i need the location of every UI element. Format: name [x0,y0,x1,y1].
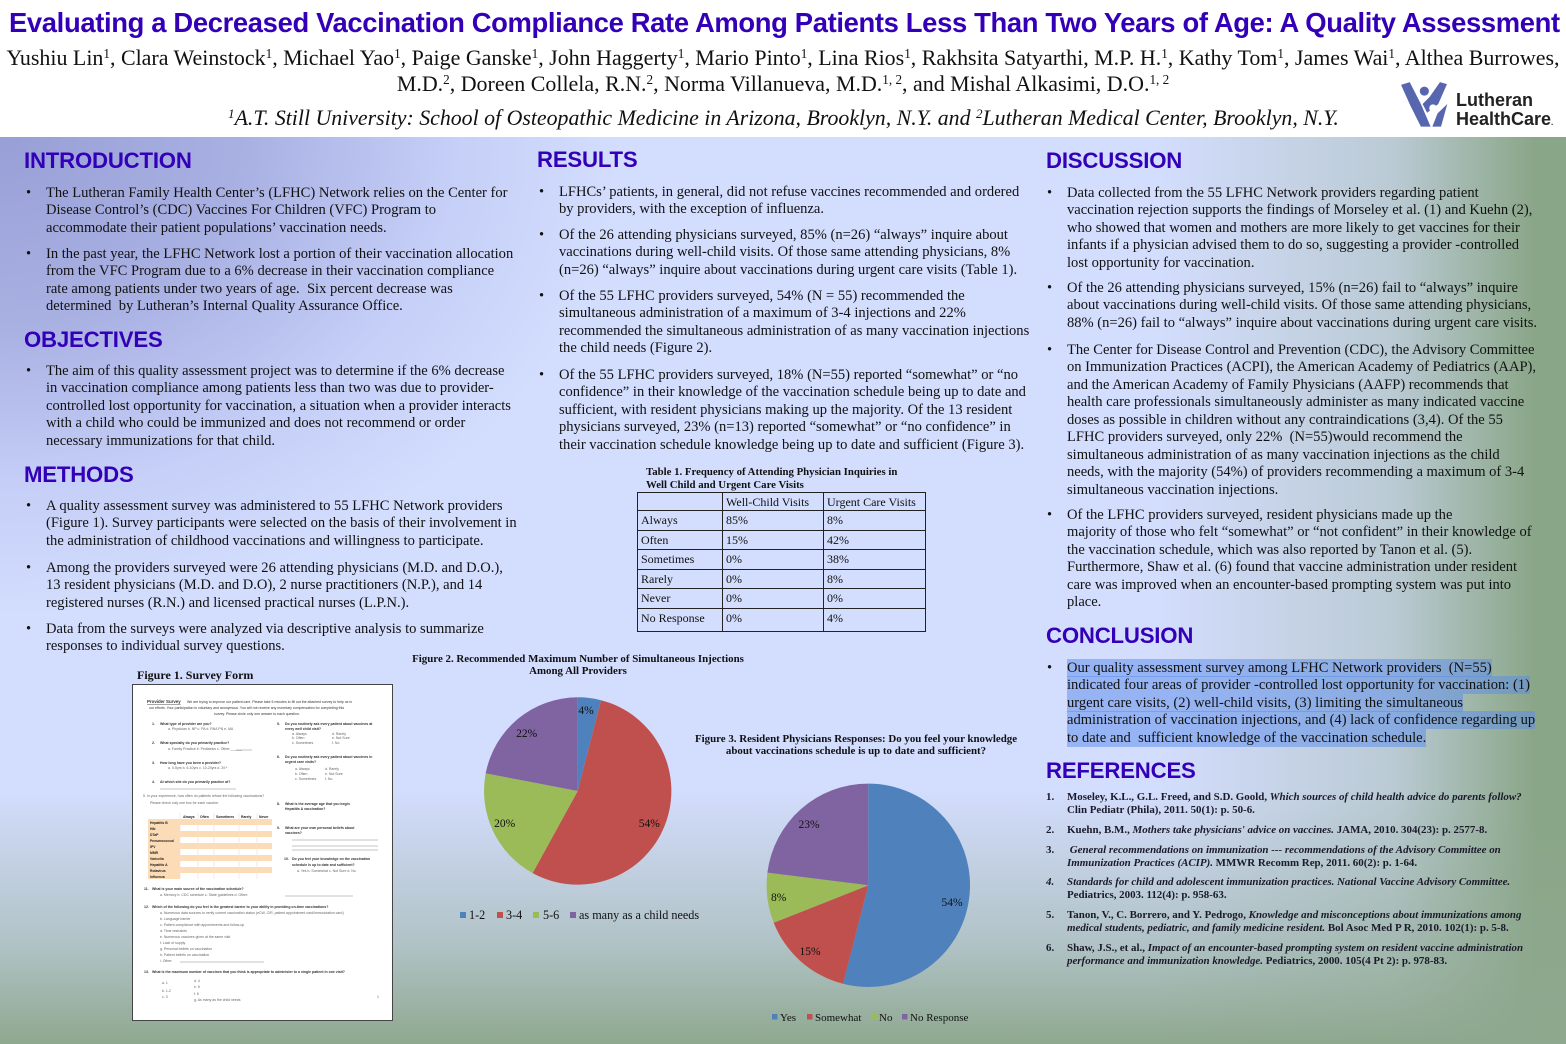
survey vaccine table: Varicella [150,857,164,861]
survey vaccine table: DTaP [150,833,159,837]
text: conclusion highlighted [1067,660,1535,747]
survey vaccine table: Never [259,815,269,819]
reference 6: performance and immunization knowledge. Pediatrics, 2000. 105(4 Pt 2): p. 978-83. [1067,955,1447,967]
survey vaccine table: Rotavirus [150,869,166,873]
figure 1: survey form: every well child visit? [285,727,321,731]
table 1: Always [641,513,678,527]
figure 1: survey form: Do you routinely ask every patient about vaccines at [285,722,373,726]
figure 1: survey form: What type of provider are you? [160,722,212,726]
logo: Lutheran HealthCare [1401,82,1553,129]
figure 1: survey form: What is the maximum number of vaccines that you think is appropriate to administer to a single patient in one visit? [152,970,345,974]
caption: table 1 [646,466,898,491]
text: 6. [1046,942,1054,954]
table 1: Often [641,533,668,547]
figure 1: survey form: d. Time restraints [160,929,187,933]
table 1: 15% [726,533,748,547]
figure 1: survey form: e. Numerous vaccines given at the same visit [160,935,230,939]
text: objectives: controlled lost opportunity for vaccination, a situation when a provider interacts [46,398,511,414]
text: discussion paragraph 2 [1067,280,1537,332]
figure 1: survey form: 1 [377,995,379,999]
figure 1: survey form: g. As many as the child needs [194,998,241,1002]
figure 1: survey form: 2. [152,741,155,745]
figure 1: survey form: 10. [284,857,289,861]
survey vaccine table: Sometimes [216,815,234,819]
reference 6 [1046,942,1523,967]
figure 1: survey form: i. Other: [160,959,172,963]
caption: figure 2 [412,653,744,677]
text: introduction paragraph 2: In the past year, the LFHC Network lost a portion of their vaccination allocation [46,246,513,262]
text: 3. [1046,844,1054,856]
table 1: 38% [827,552,849,566]
figure 1: survey form: our efforts. Your participation is voluntary and anonymous. You will not receive any monetary compensation for completing this [149,706,344,710]
text: objectives: with a child who could be immunized and does not recommend or order [46,415,465,431]
text: results paragraph 4: physicians surveyed, 23% (n=13) reported “somewhat” or “no confidence” in [559,419,1011,435]
table 1: Well-Child Visits [726,495,809,509]
text: results paragraph 2: Of the 26 attending physicians surveyed, 85% (n=26) “always” inquire about [559,227,1008,243]
text: discussion paragraph 3: on Immunization Practices (ACPI), the American Academy of Pediatrics (AAP), [1067,359,1536,375]
figure 1: survey form: a. 0-5yrs b. 6-10yrs c. 10-20yrs d. 20+ [168,766,227,770]
heading: methods: METHODS [24,462,134,487]
text: introduction paragraph 1 [46,185,507,237]
reference 4: Pediatrics, 2003. 112(4): p. 958-63. [1067,889,1227,901]
figure 1: survey form: What is the average age that you begin [285,802,350,806]
text: results paragraph 3: the child needs (Figure 2). [559,340,712,356]
figure 1: survey form: 5. In your experience, how often do patients refuse the following vaccinations? [143,794,264,798]
text: results paragraph 3: simultaneous administration of a maximum of 3-4 injections and 22% [559,305,966,321]
table 1: 0% [827,591,843,605]
caption: figure 2: Figure 2. Recommended Maximum Number of Simultaneous Injections [412,653,744,665]
table 1: Sometimes [641,552,694,566]
text: results paragraph 2: vaccinations during well-child visits. Of those same attending physicians, 8% [559,244,1010,260]
figure 1: survey form: urgent care visits? [285,760,316,764]
figure 1: survey form: a. Always [292,732,307,736]
reference 1: Clin Pediatr (Phila), 2011. 50(1): p. 50-6. [1067,804,1255,816]
text: discussion paragraph 1: lost opportunity for vaccination. [1067,255,1254,271]
text: discussion paragraph 3: health care professionals simultaneously administer as many indicated vaccine [1067,394,1524,410]
figure 1: survey form: f. No [325,777,332,781]
figure 1: survey form: schedule is up to date and sufficient? [292,863,355,867]
reference 2: Kuehn, B.M., Mothers take physicians' advice on vaccines. JAMA, 2010. 304(23): p. 2577-8. [1067,824,1487,836]
text: discussion paragraph 3 [1067,342,1536,499]
figure 1: survey form: 3. [152,761,155,765]
text: methods paragraph 2: registered nurses (R.N.) and licensed practical nurses (L.P.N.). [46,595,409,611]
figure 1: survey form: How long have you been a provider? [160,761,221,765]
table 1: No Response [641,611,705,625]
reference 1 [1046,791,1522,816]
text: objectives: necessary immunizations for that child. [46,433,275,449]
figure 3: pie chart: 15% [799,946,821,958]
caption: figure 3 [695,733,1017,757]
figure 3: pie chart: 23% [798,819,820,831]
text: discussion paragraph 3: and the American Academy of Family Physicians (AAFP) recommends that [1067,377,1509,393]
table 1: 85% [726,513,748,527]
text: discussion paragraph 2: about vaccinations during well-child visits. Of those same attending physicians, [1067,297,1531,313]
authors [6,45,1559,96]
reference 3: General recommendations on immunization --- recommendations of the Advisory Committee on [1070,844,1501,856]
text: results paragraph 4: their vaccination schedule knowledge being up to date and sufficient (Figure 3). [559,437,1024,453]
figure 1: survey form: a. Physician b. NP c. PA d. RN/LPN e. MA [168,727,234,731]
figure 1: survey form: We are trying to improve our patient care. Please take 5 minutes to fill out the attached survey to help us in [187,700,352,704]
table 1: 0% [726,572,742,586]
heading: references: REFERENCES [1046,758,1196,783]
figure 1: survey form: c. Sometimes [295,777,316,781]
figure 1: survey form: Provider Survey [147,699,181,704]
text: 1. [1046,791,1054,803]
text: methods paragraph 2 [46,560,503,612]
figure 1: survey form: d. 4 [194,979,200,983]
figure 1: survey form: a. 1 [162,981,168,985]
caption: figure 3: about vaccinations schedule is up to date and sufficient? [726,745,986,757]
text: conclusion highlighted: Our quality assessment survey among LFHC Network providers (N=55) [1067,660,1492,676]
text: introduction paragraph 1: Disease Control’s (CDC) Vaccines For Children (VFC) Program to [46,202,436,218]
figure 1: survey form: f. Lack of supply [160,941,186,945]
text: results paragraph 2: (n=26) “always” inquire about vaccinations during urgent care visits (Table 1). [559,262,1017,278]
text: objectives: The aim of this quality assessment project was to determine if the 6% decrease [46,363,504,379]
text: results paragraph 4: Of the 55 LFHC providers surveyed, 18% (N=55) reported “somewhat” or “no [559,367,1018,383]
figure 1: survey form: 8. [277,802,280,806]
survey vaccine table: Rarely [241,815,251,819]
text: 5. [1046,909,1054,921]
figure 3 legend: No [879,1012,893,1024]
text: methods paragraph 1: (Figure 1). Survey participants were selected on the basis of their involvement in [46,515,517,531]
text: discussion paragraph 3: simultaneous vaccination injections. [1067,482,1278,498]
figure 1: survey form: b. Often [292,736,305,740]
figure 1: survey form: 6. [277,755,280,759]
figure 2: pie chart [460,697,699,922]
heading: introduction: INTRODUCTION [24,148,192,173]
figure 2 legend: 1-2 [469,908,485,922]
figure 3 legend: Yes [780,1012,796,1024]
figure 1: survey form [132,684,393,1021]
heading: results: RESULTS [537,147,638,172]
figure 1: survey form: b. Often [295,772,308,776]
figure 1: survey form: What is your main source of the vaccination schedule? [152,887,244,891]
figure 1: survey form: c. 3 [162,995,168,999]
text: discussion paragraph 4 [1067,507,1532,612]
text: 2. [1046,824,1054,836]
figure 1: survey form: e. 5 [194,985,200,989]
text: results paragraph 4: confidence” in their knowledge of the vaccination schedule being up to date and [559,384,1026,400]
text: introduction paragraph 2: determined by Lutheran’s Internal Quality Assurance Office. [46,298,403,314]
text: discussion paragraph 3: LFHC providers surveyed, only 22% (N=55)would recommend the [1067,429,1463,445]
survey vaccine table: MMR [150,851,159,855]
figure 1: survey form: 12. [144,905,149,909]
figure 3 legend: Somewhat [815,1012,861,1024]
figure 1: survey form: d. Rarely [332,732,346,736]
figure 1: survey form: 5. [277,722,280,726]
reference 3 [1046,844,1501,869]
figure 1: survey form: b. 1-2 [162,989,171,993]
heading: conclusion: CONCLUSION [1046,623,1193,648]
figure 1: survey form: Do you feel your knowledge on the vaccination [292,857,370,861]
text: discussion paragraph 2: 88% (n=26) fail to “always” inquire about vaccinations during urgent care visits. [1067,315,1537,331]
table 1: Rarely [641,572,673,586]
affiliations: 1A.T. Still University: School of Osteopathic Medicine in Arizona, Brooklyn, N.Y. and 2Lutheran Medical Center, Brooklyn, N.Y. [228,106,1339,130]
text: methods paragraph 1: the administration of childhood vaccinations and willingness to participate. [46,533,484,549]
text: methods paragraph 1: A quality assessment survey was administered to 55 LFHC Network providers [46,498,503,514]
text: introduction paragraph 1: The Lutheran Family Health Center’s (LFHC) Network relies on the Center for [46,185,507,201]
figure 2 legend: as many as a child needs [579,908,699,922]
figure 1: survey form: Hepatitis A vaccination? [285,807,325,811]
text: discussion paragraph 4: place. [1067,594,1101,610]
heading: objectives: OBJECTIVES [24,327,163,352]
text: discussion paragraph 1: Data collected from the 55 LFHC Network providers regarding patient [1067,185,1479,201]
text: results paragraph 3: Of the 55 LFHC providers surveyed, 54% (N = 55) recommended the [559,288,965,304]
logo: Lutheran HealthCare: Lutheran [1456,90,1533,110]
survey vaccine table: Hepatitis B [150,821,168,825]
figure 1: survey form: Which of the following do you feel is the greatest barrier to your ability in providing on-time vaccinations? [152,905,328,909]
text: methods paragraph 2: Among the providers surveyed were 26 attending physicians (M.D. and D.O.), [46,560,503,576]
table 1: 8% [827,572,843,586]
text: discussion paragraph 1: who showed that women and mothers are more likely to get vaccines for their [1067,220,1520,236]
reference 5: medical students, pediatric, and family medicine resident. Bol Asoc Med P R, 2010. 102(1): p. 5-8. [1067,922,1509,934]
figure 3 legend: No Response [910,1012,968,1024]
figure 1: survey form: a. Yes b. Somewhat c. Not Sure d. No [297,869,356,873]
figure 1: survey form: 9. [277,826,280,830]
figure 2 legend: 5-6 [543,908,559,922]
text: methods paragraph 1 [46,498,517,550]
text: results paragraph 4: sufficient, with resident physicians making up the majority. Of the 13 resident [559,402,1012,418]
survey vaccine table: IPV [150,845,156,849]
survey vaccine table: Always [183,815,195,819]
text: results paragraph 4 [559,367,1026,454]
figure 2 legend: 3-4 [506,908,522,922]
text: results paragraph 3: recommended the simultaneous administration of as many vaccination injections [559,323,1029,339]
figure 1: survey form: e. Not Sure [325,772,343,776]
caption: figure 3: Figure 3. Resident Physicians Responses: Do you feel your knowledge [695,733,1017,745]
caption: figure 1: Figure 1. Survey Form [137,668,253,682]
survey vaccine table: Pneumococcal [150,839,174,843]
text: objectives: in vaccination compliance among patients less than two was due to provider- [46,380,494,396]
text: introduction paragraph 2: from the VFC Program due to a 6% decrease in their vaccination compliance [46,263,494,279]
text: 4. [1046,876,1054,888]
title: Evaluating a Decreased Vaccination Compliance Rate Among Patients Less Than Two Years of Age: A Quality Assessment [9,7,1560,38]
figure 1: survey form: Please check only one box for each vaccine. [150,801,219,805]
table 1 [637,492,926,632]
authors: Yushiu Lin1, Clara Weinstock1, Michael Yao1, Paige Ganske1, John Haggerty1, Mario Pinto1, Lina Rios1, Rakhsita Satyarthi, M.P. H.1, Kathy Tom1, James Wai1, Althea Burrowes, [6,45,1559,70]
text: discussion paragraph 4: care was improved when an encounter-based prompting system was put into [1067,577,1511,593]
figure 1: survey form: What specialty do you primarily practice? [160,741,229,745]
figure 1: survey form: h. Patient beliefs on vaccination [160,953,209,957]
text: discussion paragraph 2: Of the 26 attending physicians surveyed, 15% (n=26) fail to “always” inquire [1067,280,1518,296]
text: results paragraph 1: LFHCs’ patients, in general, did not refuse vaccines recommended and ordered [559,184,1019,200]
figure 1: survey form: a. Numerous data sources to verify current vaccination status (eCW, CIR, patient appointment card/immunization card) [160,911,344,915]
table 1: 0% [726,611,742,625]
survey vaccine table [148,813,272,879]
reference 4: Standards for child and adolescent immunization practices. National Vaccine Advisory Committee. [1067,876,1510,888]
figure 2: pie chart: 4% [578,705,594,717]
text: discussion paragraph 4: majority of those who felt “somewhat” or “not confident” in their knowledge of [1067,524,1532,540]
text: discussion paragraph 4: Furthermore, Shaw et al. (6) found that vaccine administration under resident [1067,559,1517,575]
reference 5: Tanon, V., C. Borrero, and Y. Pedrogo, Knowledge and misconceptions about immunizations among [1067,909,1521,921]
text: discussion paragraph 4: the vaccination schedule, which was also reported by Tanon et al. (5). [1067,542,1472,558]
reference 4 [1046,876,1510,901]
figure 1: survey form: a. Always [295,767,310,771]
table 1: 42% [827,533,849,547]
text: methods paragraph 3 [46,621,484,656]
figure 1: survey form: Do you routinely ask every patient about vaccines in [285,755,372,759]
text: methods paragraph 3: Data from the surveys were analyzed via descriptive analysis to summarize [46,621,484,637]
logo: Lutheran HealthCare: HealthCare. [1456,109,1553,129]
text: results paragraph 2 [559,227,1017,279]
text: introduction paragraph 2: rate among patients under two years of age. Six percent decrease was [46,281,453,297]
text: introduction paragraph 1: accommodate their patient populations’ vaccination needs. [46,220,387,236]
figure 3: pie chart [766,784,970,1024]
reference 1: Moseley, K.L., G.L. Freed, and S.D. Goold, Which sources of child health advice do parents follow? [1067,791,1522,803]
figure 3: pie chart: 8% [771,892,787,904]
figure 1: survey form: 11. [144,887,149,891]
figure 1: survey form: At which site do you primarily practice at? [160,780,230,784]
figure 1: survey form: f. No [332,741,339,745]
text: conclusion highlighted: urgent care visits, (2) well-child visits, (3) limiting the simultaneous [1067,695,1463,711]
text: discussion paragraph 1: vaccination rejection supports the findings of Morseley et al. (1) and Kuehn (2), [1067,202,1532,218]
reference 6: Shaw, J.S., et al., Impact of an encounter-based prompting system on resident vaccine administration [1067,942,1523,954]
figure 1: survey form: e. Not Sure [332,736,350,740]
figure 1: survey form: 1. [152,722,155,726]
figure 1: survey form: f. 6 [194,992,199,996]
text: discussion paragraph 3: needs, with the majority (54%) of providers recommending a maximum of 3-4 [1067,464,1524,480]
survey vaccine table: Often [200,815,209,819]
table 1: Never [641,591,670,605]
text: introduction paragraph 2 [46,246,513,316]
table 1: Urgent Care Visits [827,495,916,509]
reference 3: Immunization Practices (ACIP). MMWR Recomm Rep, 2011. 60(2): p. 1-64. [1067,857,1417,869]
text: results paragraph 1: by providers, with the exception of influenza. [559,201,824,217]
figure 1: survey form: a. Family Practice b. Pediatrics c. Other:______ [168,747,242,751]
figure 1: survey form: c. Patient compliance with appointments and follow-up [160,923,244,927]
figure 1: survey form: 13. [144,970,149,974]
table 1: 0% [726,591,742,605]
text: discussion paragraph 1: infants if a physician advised them to do so, suggesting a provider -controlled [1067,237,1519,253]
figure 1: survey form: c. Sometimes [292,741,313,745]
figure 2 legend [460,908,699,922]
text: discussion paragraph 4: Of the LFHC providers surveyed, resident physicians made up the [1067,507,1452,523]
text: conclusion highlighted: to date and sufficient knowledge of the vaccination schedule. [1067,730,1426,746]
text: conclusion highlighted: administration of vaccination injections, and (4) lack of confidence regarding up [1067,712,1535,728]
survey vaccine table: Influenza [150,875,165,879]
table 1: 8% [827,513,843,527]
figure 1: survey form: vaccines? [285,831,302,835]
figure 1: survey form: a. Memory b. CDC schedule c. State guidelines d. Other: [160,893,248,897]
figure 2: pie chart: 54% [639,818,660,830]
text: results paragraph 3 [559,288,1029,358]
caption: table 1: Well Child and Urgent Care Visits [646,479,804,491]
table 1: 4% [827,611,843,625]
text: objectives [46,363,511,450]
reference 5 [1046,909,1522,934]
caption: figure 2: Among All Providers [529,665,627,677]
figure 1: survey form: d. Rarely [325,767,339,771]
survey vaccine table: Hepatitis A [150,863,168,867]
figure 1: survey form: survey. Please circle only one answer to each question. [214,712,300,716]
figure 1: survey form: g. Personal beliefs on vaccination [160,947,212,951]
text: discussion paragraph 3: doses as possible in children without any contraindications (3,4). Of the 55 [1067,412,1503,428]
survey vaccine table: Hib [150,827,155,831]
figure 1: survey form: b. Language barrier [160,917,191,921]
text: methods paragraph 2: 13 resident physicians (M.D. and D.O), 2 nurse practitioners (N.P.), and 14 [46,577,482,593]
text: conclusion highlighted: indicated four areas of provider -controlled lost opportunity for vaccination: (1) [1067,677,1530,693]
figure 3 legend [772,1012,968,1024]
figure 1: survey form: What are your own personal beliefs about [285,826,355,830]
text: methods paragraph 3: responses to individual survey questions. [46,638,285,654]
text: discussion paragraph 1 [1067,185,1532,272]
figure 1: survey form: 4. [152,780,155,784]
figure 2: pie chart: 22% [516,728,538,740]
text: discussion paragraph 3: The Center for Disease Control and Prevention (CDC), the Advisory Committee [1067,342,1534,358]
text: discussion paragraph 3: simultaneous administration of as many vaccination injections as the child [1067,447,1500,463]
table 1: 0% [726,552,742,566]
figure 2: pie chart: 20% [494,818,516,830]
caption: table 1: Table 1. Frequency of Attending Physician Inquiries in [646,466,897,478]
heading: discussion: DISCUSSION [1046,148,1182,173]
text: results paragraph 1 [559,184,1019,219]
authors: M.D.2, Doreen Collela, R.N.2, Norma Villanueva, M.D.1, 2, and Mishal Alkasimi, D.O.1, 2 [397,71,1169,96]
figure 3: pie chart: 54% [941,897,963,909]
